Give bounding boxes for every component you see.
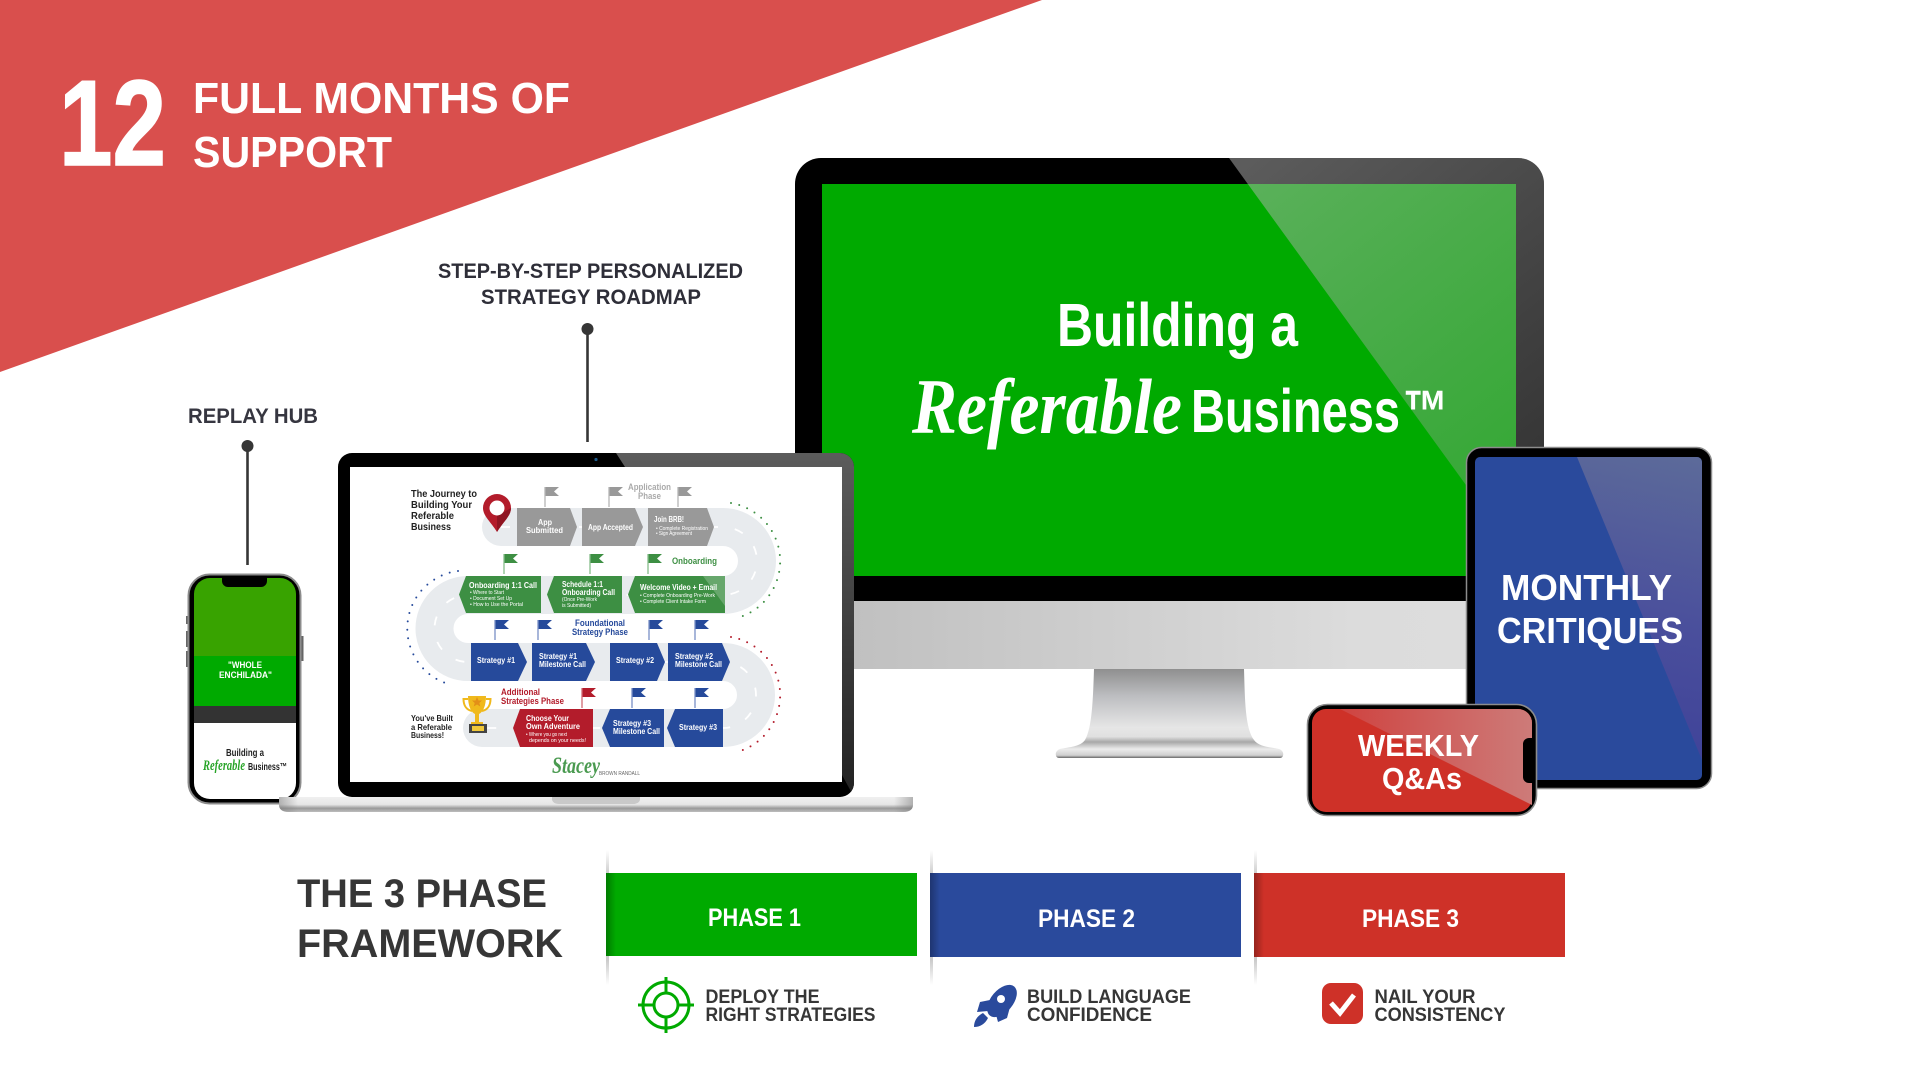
callout: replay hub: REPLAY HUB	[188, 405, 318, 428]
strategy step text: Own Adventure	[526, 722, 580, 731]
phase labels	[501, 482, 717, 707]
strategy step text: Strategy #2	[675, 652, 713, 661]
phone label: whole enchilada: "WHOLE	[228, 660, 262, 671]
laptop glare	[616, 453, 854, 797]
finish label	[411, 713, 453, 740]
strategy step text: Strategy #3	[613, 719, 651, 728]
callout: replay hub	[188, 405, 318, 565]
application step text	[526, 515, 708, 537]
onboarding step text: Onboarding 1:1 Call	[469, 581, 537, 590]
heading: 12 full months of support	[59, 55, 570, 191]
strategy step text: Strategy #3	[679, 723, 717, 732]
heading: 12 full months of support: 12	[59, 55, 166, 191]
landscape phone screen	[1312, 709, 1532, 812]
phase 3 bar	[1254, 850, 1565, 985]
onboarding step text: • Where to Start	[470, 590, 505, 596]
onboarding steps	[459, 576, 725, 613]
strategy step text: • Where you go next	[526, 732, 568, 738]
application step text: App Accepted	[588, 523, 633, 532]
icon: rocket	[974, 979, 1023, 1027]
monitor glare	[1229, 158, 1544, 485]
phone mini logo: Referable	[202, 758, 245, 774]
landscape phone glare	[1340, 709, 1532, 805]
tablet label	[1497, 567, 1683, 651]
strategy step text: depends on your needs!	[529, 738, 586, 744]
landscape phone label: WEEKLY	[1358, 728, 1479, 763]
phone body	[188, 574, 300, 804]
heading: the 3 phase framework	[297, 872, 563, 966]
signature logo	[552, 753, 640, 778]
dotted edges	[407, 503, 780, 752]
finish label: a Referable	[411, 722, 452, 732]
strategy step text: Milestone Call	[613, 727, 660, 736]
phase 3 caption	[1374, 987, 1506, 1026]
tablet label: MONTHLY	[1501, 567, 1672, 608]
choose your own adventure step	[513, 709, 593, 747]
onboarding step text: • Document Set Up	[470, 596, 512, 602]
callout: strategy roadmap	[438, 260, 743, 442]
callout: strategy roadmap: STEP-BY-STEP PERSONALIZED	[438, 260, 743, 283]
phase 1 caption: RIGHT STRATEGIES	[706, 1005, 876, 1026]
roadmap title: Referable	[411, 510, 454, 522]
roadmap diagram	[407, 482, 780, 778]
road	[434, 527, 757, 728]
strategy steps	[471, 643, 730, 747]
phone mini logo	[202, 748, 287, 774]
phone label: whole enchilada	[219, 660, 272, 681]
phase 3 column	[1254, 850, 1565, 1026]
strategy step text: Milestone Call	[539, 660, 586, 669]
red flag	[582, 688, 596, 708]
signature logo: Stacey	[552, 753, 601, 778]
phase labels: Phase	[638, 491, 661, 502]
monitor screen	[822, 184, 1516, 576]
onboarding step text: • Complete Client Intake Form	[640, 599, 706, 605]
onboarding step text: • Complete Onboarding Pre-Work	[640, 593, 716, 599]
monitor chin	[795, 601, 1544, 669]
onboarding step text: • How to Use the Portal	[470, 602, 523, 608]
left phone: replay hub	[186, 574, 304, 804]
laptop	[279, 453, 913, 812]
strategy step text	[477, 652, 722, 744]
phase 2 caption	[1027, 987, 1191, 1026]
roadmap title: Business	[411, 521, 451, 533]
phone screen	[194, 578, 296, 799]
tablet glare	[1577, 457, 1702, 760]
callout: strategy roadmap: STRATEGY ROADMAP	[481, 286, 701, 309]
strategy step text: Milestone Call	[675, 660, 722, 669]
map pin	[483, 494, 511, 532]
green flags	[504, 554, 662, 574]
phase 2 caption: CONFIDENCE	[1027, 1005, 1152, 1026]
landscape phone notch	[1523, 738, 1532, 783]
landscape phone: weekly q&as	[1308, 704, 1536, 816]
phase 1 caption: DEPLOY THE	[706, 987, 820, 1008]
phase labels: Onboarding	[672, 556, 717, 567]
onboarding step text: Welcome Video + Email	[640, 583, 717, 592]
heading: 12 full months of support: SUPPORT	[193, 128, 392, 177]
heading: the 3 phase framework: THE 3 PHASE	[297, 872, 547, 916]
signature logo: BROWN RANDALL	[599, 771, 640, 777]
phase 3 caption: NAIL YOUR	[1374, 987, 1476, 1008]
monitor title: Business	[1191, 377, 1400, 445]
finish label: You've Built	[411, 713, 453, 723]
tablet label: CRITIQUES	[1497, 610, 1683, 651]
onboarding step text: (Once Pre-Work	[562, 597, 597, 603]
application step text: • Complete Registration	[656, 526, 708, 532]
desktop monitor	[795, 158, 1550, 758]
roadmap title	[411, 488, 477, 533]
laptop camera	[594, 458, 598, 461]
laptop base	[279, 797, 913, 812]
strategy step text: Strategy #1	[539, 652, 577, 661]
onboarding step text: Onboarding Call	[562, 588, 615, 597]
icon: check box	[1322, 983, 1363, 1024]
phase 2 caption: BUILD LANGUAGE	[1027, 987, 1191, 1008]
phone mini logo: Business™	[248, 762, 287, 773]
monitor bezel	[795, 158, 1544, 601]
application step text: • Sign Agreement	[656, 531, 693, 537]
grey flags	[545, 487, 692, 507]
phase labels: Foundational	[575, 618, 625, 629]
heading: 12 full months of support: FULL MONTHS OF	[193, 74, 570, 123]
blue flags	[495, 620, 709, 708]
application step text: App	[538, 518, 552, 527]
landscape phone label: Q&As	[1382, 761, 1462, 796]
landscape phone label	[1358, 728, 1479, 796]
phase labels: Strategy Phase	[572, 627, 628, 638]
phone mini logo: Building a	[226, 748, 264, 759]
tablet screen	[1475, 457, 1702, 780]
landscape phone body	[1308, 704, 1536, 816]
application phase steps	[517, 508, 714, 546]
monitor title: Building a	[1057, 291, 1299, 359]
onboarding step text: Schedule 1:1	[562, 580, 603, 589]
phase 1 caption	[706, 987, 876, 1026]
heading: the 3 phase framework: FRAMEWORK	[297, 922, 563, 966]
laptop screen	[350, 467, 842, 782]
roadmap title: The Journey to	[411, 488, 477, 500]
application step text: Submitted	[526, 526, 563, 535]
road centre dashes	[434, 527, 757, 728]
phone side buttons	[186, 616, 304, 667]
phase 1 bar: PHASE 1	[708, 904, 801, 932]
onboarding step text	[469, 580, 717, 609]
monitor title: ™	[1403, 378, 1448, 445]
strategy step text: Choose Your	[526, 714, 569, 723]
phase 1 column	[606, 850, 917, 1033]
phase 2 bar: PHASE 2	[1038, 905, 1135, 933]
phase 1 bar	[606, 850, 917, 985]
icon: target	[638, 977, 694, 1033]
phase 3 caption: CONSISTENCY	[1374, 1005, 1506, 1026]
finish label: Business!	[411, 730, 444, 740]
strategy step text: Strategy #2	[616, 656, 654, 665]
monitor stand	[1056, 669, 1283, 758]
phase labels: Application	[628, 482, 671, 493]
onboarding step corner glare	[703, 576, 725, 606]
strategy step text: Strategy #1	[477, 656, 515, 665]
phase 2 bar	[930, 850, 1241, 985]
tablet body	[1466, 448, 1712, 788]
phase 2 column	[930, 850, 1241, 1027]
tablet: monthly critiques	[1466, 448, 1712, 788]
phone label: whole enchilada: ENCHILADA"	[219, 670, 272, 681]
monitor title	[911, 291, 1448, 450]
phase 3 bar: PHASE 3	[1362, 905, 1459, 933]
onboarding step text: is Submitted)	[562, 603, 591, 609]
red corner banner	[0, 0, 1042, 372]
monitor title: Referable	[911, 363, 1182, 450]
phase labels: Additional	[501, 687, 540, 698]
phase labels: Strategies Phase	[501, 696, 564, 707]
application step text: Join BRB!	[654, 515, 684, 524]
trophy	[464, 696, 490, 733]
roadmap title: Building Your	[411, 499, 472, 511]
laptop lid	[338, 453, 854, 797]
